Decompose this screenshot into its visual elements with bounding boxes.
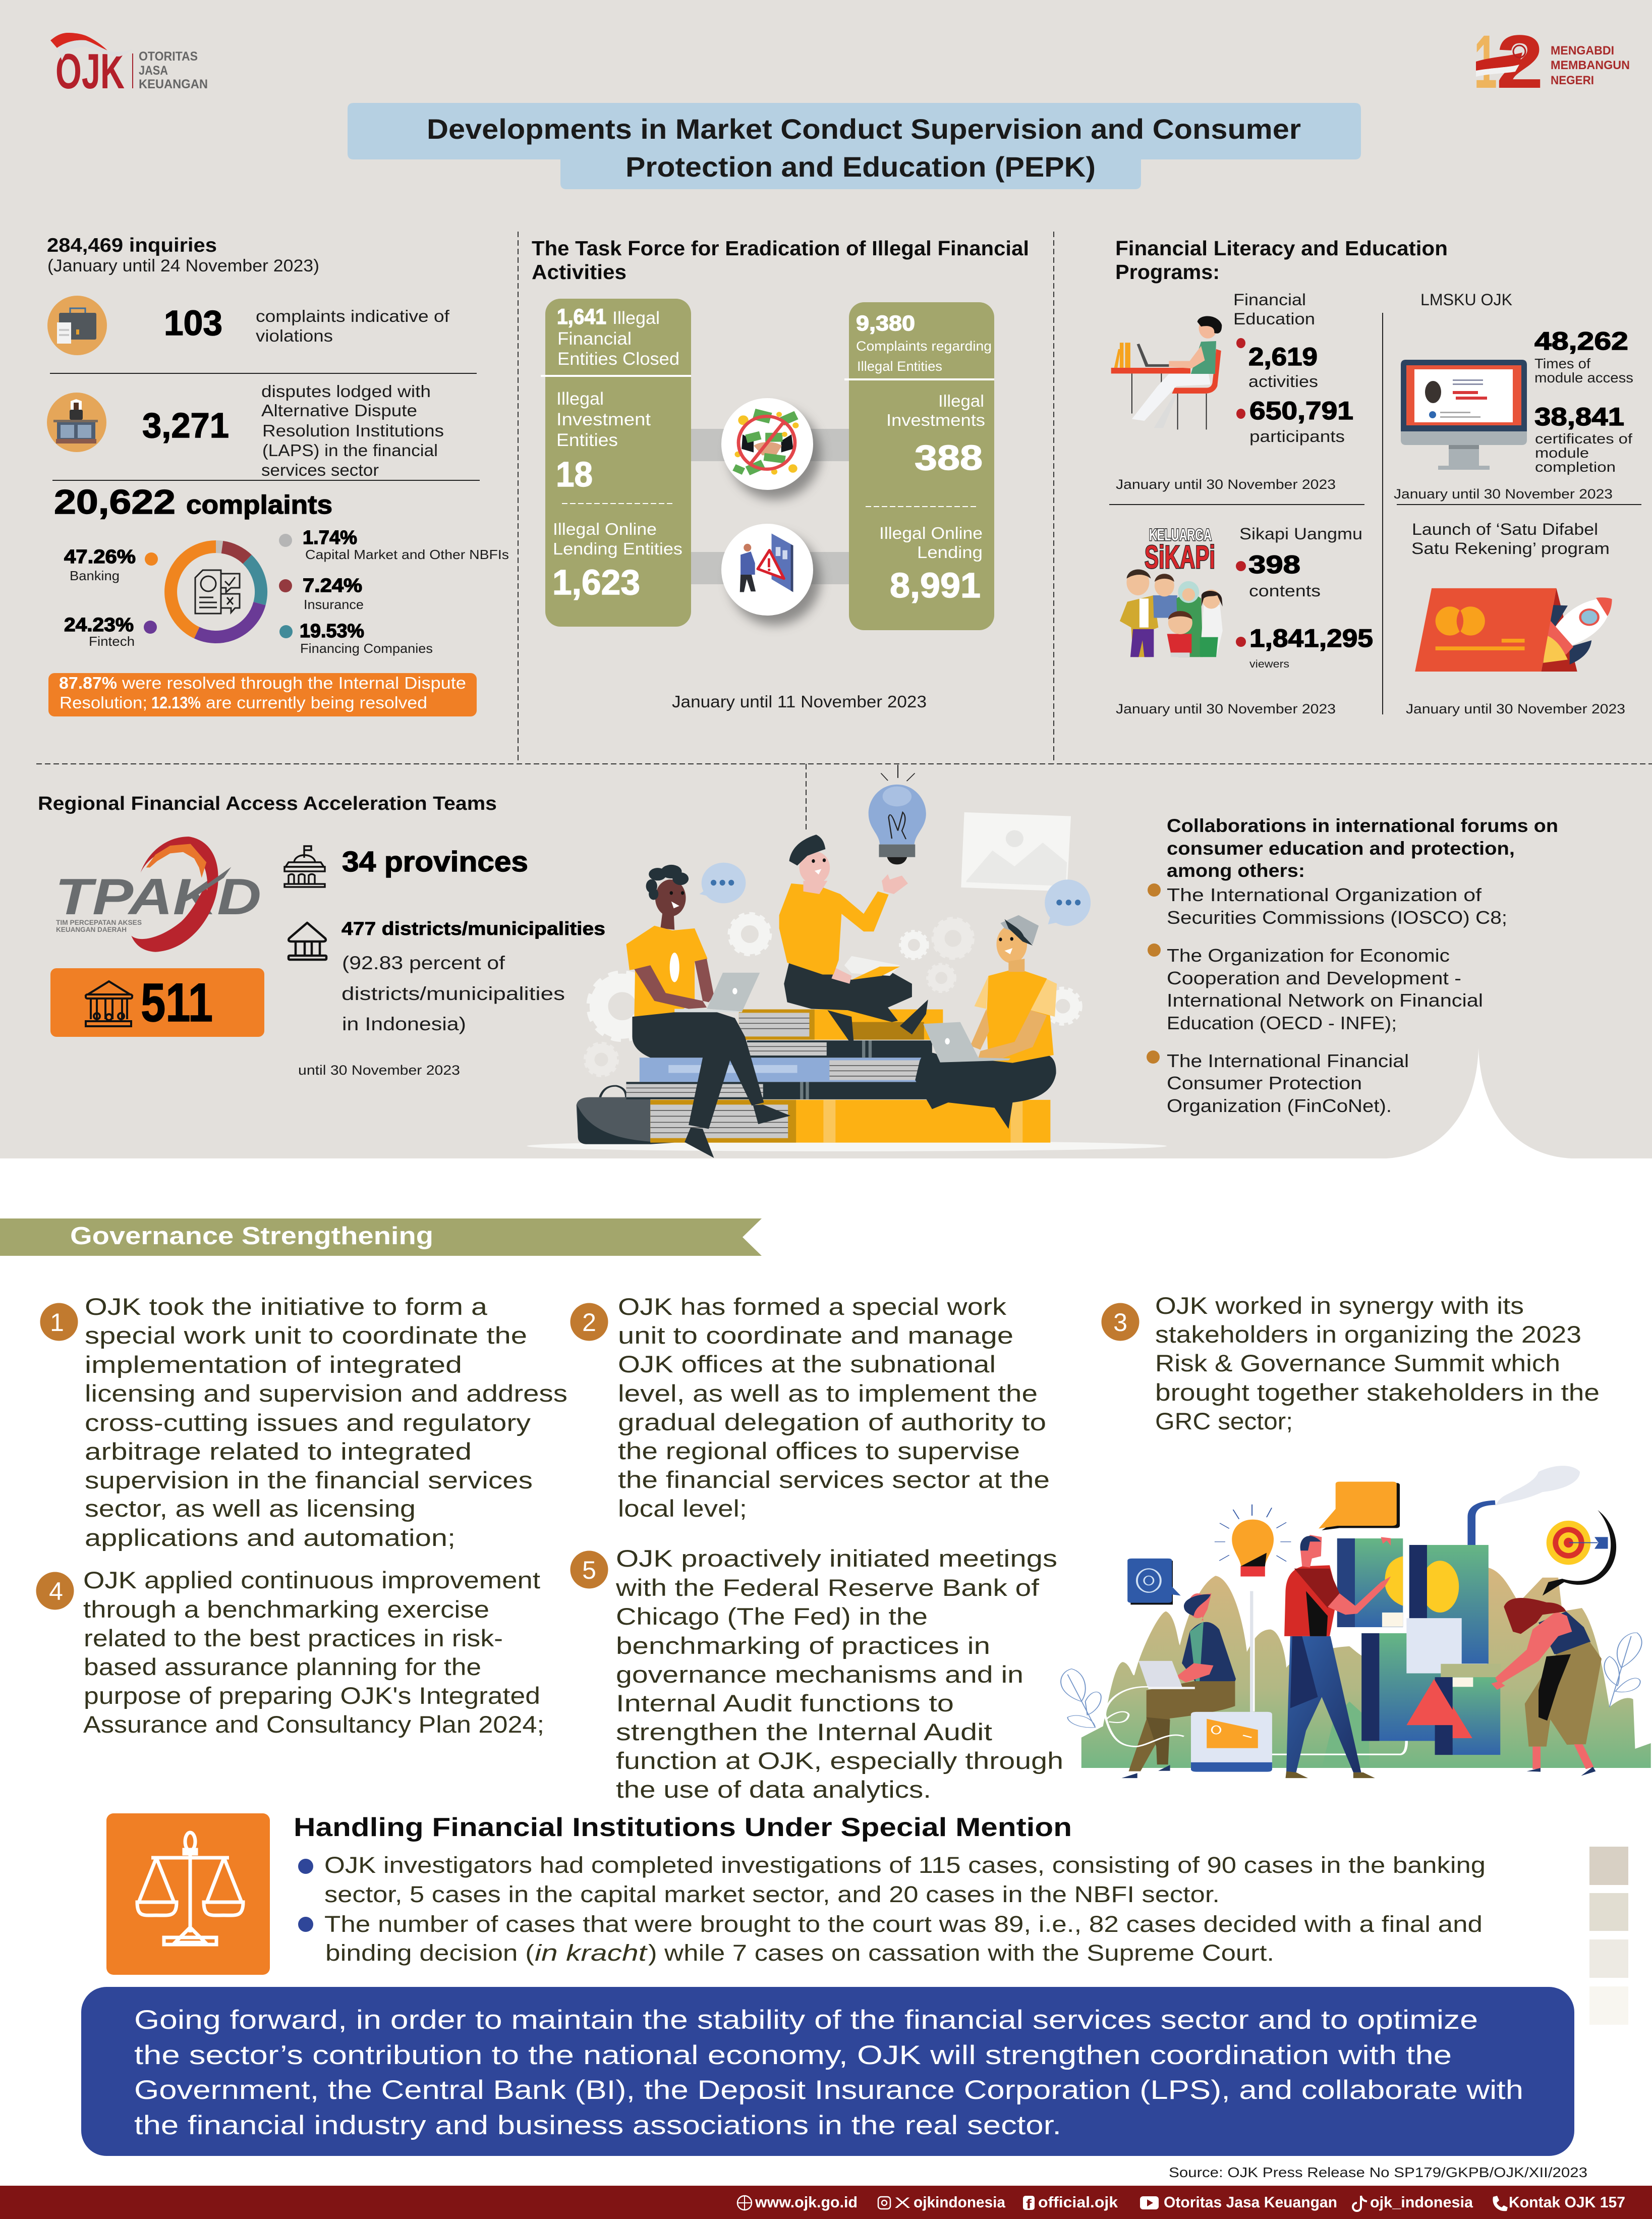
text block: item 5: governance mechanisms and in <box>616 1661 1023 1688</box>
footer: official.ojk <box>1038 2193 1118 2211</box>
card: entities closed: 18 <box>556 455 593 494</box>
title: Developments in Market Conduct Supervision and Consumer <box>427 113 1301 145</box>
text block: item 4: based assurance planning for the <box>84 1653 481 1680</box>
text block: item 2: gradual delegation of authority to <box>618 1409 1046 1435</box>
logo: 12 years: 2 <box>1496 19 1544 104</box>
block: LMSKU OJK: module access <box>1534 370 1633 385</box>
callout: going forward: Going forward, in order to maintain the stability of the financial services sector and to optimize <box>134 2005 1478 2035</box>
logo: OJK: OTORITAS <box>139 49 198 64</box>
callout: resolution rates: Resolution; <box>60 693 147 712</box>
block: international collaborations: International Network on Financial <box>1167 990 1483 1011</box>
text block: item 2: unit to coordinate and manage <box>618 1322 1013 1349</box>
donut chart <box>171 547 261 637</box>
stat: 477 districts: 477 districts/municipalities <box>341 918 605 939</box>
lightbulb <box>1215 1505 1291 1562</box>
bullet text: court cases <box>298 1911 1483 1966</box>
stat: 103 complaints: violations <box>256 326 333 345</box>
card: complaints regarding illegal entities: 8,991 <box>890 566 981 605</box>
footer: f <box>1026 2196 1032 2211</box>
bubbles <box>702 863 746 903</box>
block: Satu Difabel Satu Rekening <box>1406 520 1625 716</box>
stat: 3,271 disputes <box>142 382 444 479</box>
text block: item 1: licensing and supervision and address <box>85 1380 567 1407</box>
block: LMSKU OJK: Times of <box>1534 356 1590 371</box>
icon: complaint document <box>195 570 240 614</box>
heading: financial literacy: Financial Literacy and Education <box>1115 237 1448 260</box>
legend: financing companies <box>279 621 433 656</box>
text block: item 5: OJK proactively initiated meetings <box>616 1545 1057 1572</box>
stat: 477 districts: in Indonesia) <box>342 1014 466 1034</box>
block: Satu Difabel Satu Rekening: Satu Rekening’ program <box>1411 539 1610 558</box>
legend: capital market <box>279 527 509 562</box>
text block: item 4: OJK applied continuous improvement <box>83 1567 540 1593</box>
block: international collaborations: The International Financial <box>1167 1050 1409 1071</box>
decorative squares <box>1589 1847 1628 2025</box>
background panel <box>0 0 1652 1158</box>
text block: item 5: function at OJK, especially through <box>616 1747 1063 1774</box>
logo: 12 years <box>1474 19 1630 104</box>
bullet text: court cases: The number of cases that were brought to the court was 89, i.e., 82 cases decided with a final and <box>324 1911 1483 1937</box>
block: international collaborations: Organization (FinCoNet). <box>1167 1095 1392 1116</box>
banner: Governance Strengthening: Governance Strengthening <box>70 1223 433 1250</box>
title: Protection and Education (PEPK) <box>625 151 1096 183</box>
block: Satu Difabel Satu Rekening: January until 30 November 2023 <box>1406 701 1625 716</box>
bullet text: court cases: in kracht <box>535 1940 648 1966</box>
block: international collaborations: Securities Commissions (IOSCO) C8; <box>1167 907 1507 928</box>
panel: task force <box>532 237 1029 711</box>
panel: financial literacy <box>1109 237 1641 716</box>
block: Sikapi Uangmu <box>1116 525 1373 716</box>
footer: ojk_indonesia <box>1370 2193 1473 2211</box>
speech bubbles <box>1322 1483 1400 1530</box>
stat: 477 districts: (92.83 percent of <box>342 953 505 973</box>
bullet text: court cases: binding decision ( <box>325 1940 534 1966</box>
illustration: Sikapi family: SiKAPi <box>1145 539 1215 575</box>
legend: capital market: 1.74% <box>303 527 357 548</box>
logo: 12 years: MENGABDI <box>1551 44 1614 58</box>
stat: 3,271 disputes: Resolution Institutions <box>262 421 444 440</box>
block: international collaborations: Consumer Protection <box>1167 1073 1362 1093</box>
legend: insurance: Insurance <box>304 597 364 612</box>
icon: briefcase <box>47 296 107 355</box>
callout: going forward <box>81 1987 1574 2156</box>
logo: 12 years: MEMBANGUN <box>1551 59 1630 72</box>
text block: item 3: GRC sector; <box>1155 1408 1293 1434</box>
logo: OJK: KEUANGAN <box>139 77 208 91</box>
card: entities closed <box>541 299 691 627</box>
man in red <box>1284 1535 1391 1778</box>
illustration: card and rocket <box>1415 588 1612 672</box>
card: complaints regarding illegal entities: Lending <box>917 543 983 562</box>
block: Sikapi Uangmu: January until 30 November 2023 <box>1116 701 1336 716</box>
title <box>348 103 1361 189</box>
white spire cut-out <box>1386 1048 1571 1158</box>
man with laptop <box>1105 1593 1236 1778</box>
logo: TPAKD <box>55 837 261 952</box>
panel: handling financial institutions <box>106 1813 1486 1975</box>
bullet text: court cases: ) while 7 cases on cassation with the Supreme Court. <box>648 1940 1274 1966</box>
text block: item 4: through a benchmarking exercise <box>83 1596 489 1623</box>
legend: banking: 47.26% <box>64 546 136 568</box>
legend: insurance: 7.24% <box>303 575 362 596</box>
logo: OJK: JASA <box>139 64 168 78</box>
text block: item 2: the regional offices to supervise <box>618 1437 1020 1464</box>
card: complaints regarding illegal entities: 388 <box>915 438 983 477</box>
text block: item 1: cross-cutting issues and regulatory <box>85 1409 531 1436</box>
illustration: Sikapi family: KELUARGA <box>1149 526 1212 544</box>
text block: item 2: OJK offices at the subnational <box>618 1351 996 1377</box>
illustration: monitor <box>1401 360 1527 470</box>
logo: TPAKD: TPAKD <box>55 869 261 925</box>
plants <box>1061 1633 1642 1728</box>
block: Sikapi Uangmu: contents <box>1249 582 1321 600</box>
stat: 3,271 disputes: disputes lodged with <box>261 382 431 401</box>
block: LMSKU OJK: module <box>1535 445 1589 461</box>
text block: item 2: local level; <box>618 1495 747 1522</box>
footer: ojkindonesia <box>914 2193 1006 2211</box>
footer: Kontak OJK 157 <box>1509 2193 1625 2211</box>
block: financial education: participants <box>1249 427 1345 446</box>
legend: fintech: 24.23% <box>64 615 134 636</box>
legend: banking <box>64 546 158 583</box>
text block: item 1: implementation of integrated <box>85 1351 462 1378</box>
block: international collaborations: The Organization for Economic <box>1167 945 1450 966</box>
block: Satu Difabel Satu Rekening: Launch of ‘Satu Difabel <box>1412 520 1598 538</box>
text block: item 1: arbitrage related to integrated <box>85 1438 472 1465</box>
stat: 3,271 disputes: Alternative Dispute <box>261 401 417 420</box>
block: financial education: January until 30 November 2023 <box>1116 477 1336 492</box>
stat: 103 complaints: 103 <box>164 303 222 343</box>
block: LMSKU OJK: 48,262 <box>1534 327 1628 355</box>
text block: item 1: OJK took the initiative to form a <box>85 1293 488 1320</box>
card: complaints regarding illegal entities: Illegal Online <box>879 524 983 542</box>
text block: item 5: benchmarking of practices in <box>616 1632 990 1659</box>
logo: TPAKD: TIM PERCEPATAN AKSES <box>56 918 142 926</box>
stat: 3,271 disputes: (LAPS) in the financial <box>262 441 438 460</box>
text block: item 3: 3 <box>1113 1308 1127 1337</box>
block: financial education: 650,791 <box>1249 397 1353 425</box>
block: international collaborations: The International Organization of <box>1167 884 1482 905</box>
text block: item 3 <box>1102 1292 1600 1434</box>
card: entities closed: 1,623 <box>552 563 640 602</box>
text block: item 2: level, as well as to implement the <box>618 1380 1038 1407</box>
callout: going forward: the financial industry and business associations in the real sector. <box>134 2111 1061 2140</box>
block: LMSKU OJK: completion <box>1535 459 1616 475</box>
text block: item 4: related to the best practices in risk- <box>84 1625 503 1651</box>
block: international collaborations <box>1147 815 1558 1116</box>
stat: 34 provinces: 34 provinces <box>342 846 528 878</box>
card: complaints regarding illegal entities: Complaints regarding <box>856 339 992 354</box>
bullet text: investigations: OJK investigators had completed investigations of 115 cases, consisting of 90 cases in the banking <box>324 1852 1486 1878</box>
text block: item 5: Chicago (The Fed) in the <box>616 1603 928 1630</box>
callout: resolution rates: are currently being resolved <box>206 693 427 712</box>
callout: resolution rates <box>48 673 477 716</box>
stat: 103 complaints: complaints indicative of <box>256 307 450 325</box>
text block: item 1: supervision in the financial services <box>85 1467 533 1493</box>
text block: item 2: 2 <box>582 1308 596 1337</box>
heading: regional teams: Regional Financial Access Acceleration Teams <box>38 793 497 814</box>
heading: 20,622 complaints: complaints <box>186 490 332 520</box>
illustration: governance team <box>1061 1466 1651 1778</box>
text block: item 1: sector, as well as licensing <box>85 1495 416 1522</box>
block: Sikapi Uangmu: viewers <box>1249 658 1289 670</box>
bullet text: investigations: sector, 5 cases in the capital market sector, and 20 cases in the NBFI sector. <box>324 1881 1220 1907</box>
illustration: Sikapi family <box>1120 526 1223 657</box>
icon: provincial building <box>284 846 325 887</box>
logo: 12 years: 1 <box>1474 19 1497 104</box>
heading: handling institutions: Handling Financial Institutions Under Special Mention <box>294 1813 1072 1842</box>
heading: inquiries: 284,469 inquiries <box>47 235 217 256</box>
text block: item 3: OJK worked in synergy with its <box>1155 1292 1524 1319</box>
card: entities closed: 1,641 <box>557 305 606 329</box>
icon: scales of justice <box>106 1813 270 1975</box>
legend: financing companies: 19.53% <box>300 621 364 642</box>
block: financial education: Education <box>1233 310 1315 328</box>
logo: OJK: OJK <box>55 43 125 99</box>
card: entities closed: Illegal Online <box>553 520 657 538</box>
logo: TPAKD: KEUANGAN DAERAH <box>56 925 127 933</box>
card: complaints regarding illegal entities: Illegal Entities <box>857 359 942 374</box>
text block: item 2: the financial services sector at the <box>618 1466 1050 1493</box>
text block: item 4: Assurance and Consultancy Plan 2024; <box>83 1711 544 1738</box>
footer: X <box>894 2195 910 2211</box>
callout: going forward: the sector’s contribution to the national economy, OJK will strengthen coordination with the <box>134 2040 1452 2070</box>
text block: item 4: 4 <box>49 1577 63 1605</box>
block: financial education <box>1111 291 1353 492</box>
callout: resolution rates: were resolved through the Internal Dispute <box>122 674 466 692</box>
block: Sikapi Uangmu: 1,841,295 <box>1249 624 1373 652</box>
icon: prohibited money handshake <box>721 398 821 500</box>
card: entities closed: Financial <box>557 329 632 349</box>
woman <box>1491 1598 1602 1776</box>
icon: bank with people <box>86 981 132 1026</box>
block: financial education: 2,619 <box>1248 343 1318 371</box>
text block: item 1: 1 <box>50 1308 64 1337</box>
block: international collaborations: consumer education and protection, <box>1167 838 1515 859</box>
text block: item 3: stakeholders in organizing the 2023 <box>1155 1321 1581 1348</box>
block: international collaborations: Education (OECD - INFE); <box>1167 1013 1397 1033</box>
stat: 511 teams <box>50 968 264 1037</box>
heading: financial literacy <box>1115 237 1448 284</box>
text block: item 5: strengthen the Internal Audit <box>616 1718 992 1745</box>
source: Source: OJK Press Release No SP179/GKPB/OJK/XII/2023 <box>1169 2165 1587 2180</box>
block: LMSKU OJK: LMSKU OJK <box>1420 291 1512 309</box>
pipe and smoke <box>1471 1503 1495 1546</box>
card: complaints regarding illegal entities: Illegal <box>938 392 984 410</box>
card: entities closed: Lending Entities <box>553 539 682 558</box>
text block: item 1: special work unit to coordinate the <box>85 1322 527 1349</box>
icon: judge <box>47 393 106 452</box>
text block: item 3: brought together stakeholders in the <box>1155 1379 1600 1406</box>
legend: financing companies: Financing Companies <box>300 641 433 656</box>
block: international collaborations: Collaborations in international forums on <box>1167 815 1558 836</box>
bullet text: investigations <box>298 1852 1486 1907</box>
text block: item 2: OJK has formed a special work <box>618 1293 1007 1320</box>
gear bubble <box>1130 1561 1173 1604</box>
icon: online lending warning <box>721 524 821 625</box>
target <box>1547 1521 1590 1565</box>
person 2 <box>779 835 928 1042</box>
block: LMSKU OJK: January until 30 November 2023 <box>1394 486 1613 502</box>
heading: financial literacy: Programs: <box>1115 260 1220 284</box>
text block: item 4: purpose of preparing OJK's Integrated <box>84 1682 540 1709</box>
heading: 20,622 complaints <box>54 483 332 521</box>
card: entities closed: Entities <box>556 430 618 450</box>
stat: 477 districts: districts/municipalities <box>341 983 565 1004</box>
legend: fintech: Fintech <box>89 634 135 649</box>
date label: task force: January until 11 November 2023 <box>672 692 927 711</box>
callout: going forward: Government, the Central Bank (BI), the Deposit Insurance Corporation (LPS), and collaborate with <box>134 2075 1523 2105</box>
card: complaints regarding illegal entities: Investments <box>886 411 985 429</box>
card: entities closed: Illegal <box>556 389 604 409</box>
block: LMSKU OJK: 38,841 <box>1534 403 1624 431</box>
person 3 <box>915 915 1057 1129</box>
stat: 477 districts <box>289 918 605 1034</box>
book stack <box>577 1097 650 1144</box>
block: Sikapi Uangmu: Sikapi Uangmu <box>1239 525 1362 543</box>
heading: task force: Activities <box>532 260 626 284</box>
person 1 <box>626 865 790 1158</box>
date label: regional teams: until 30 November 2023 <box>298 1063 460 1078</box>
text block: item 5 <box>570 1545 1063 1803</box>
card: entities closed: Illegal <box>612 308 660 328</box>
stat: 3,271 disputes: services sector <box>261 461 379 479</box>
text block: item 5: Internal Audit functions to <box>616 1690 954 1716</box>
text block: item 1: applications and automation; <box>85 1524 455 1551</box>
heading: 20,622 complaints: 20,622 <box>54 483 176 521</box>
heading: task force <box>532 237 1029 284</box>
illustration: students on books <box>527 765 1167 1158</box>
panels <box>1361 1633 1441 1741</box>
legend: banking: Banking <box>70 568 120 583</box>
stat: 3,271 disputes: 3,271 <box>142 406 229 445</box>
gears <box>585 914 1080 1076</box>
callout: resolution rates: 12.13% <box>151 693 201 712</box>
heading: inquiries: (January until 24 November 2023) <box>47 256 319 275</box>
footer <box>0 2186 1652 2219</box>
card: entities closed: Entities Closed <box>557 349 679 369</box>
block: international collaborations: among others: <box>1167 860 1305 881</box>
text block: item 4 <box>36 1567 544 1738</box>
text block: item 3: Risk & Governance Summit which <box>1155 1350 1560 1376</box>
lightbulb <box>881 765 915 781</box>
footer: www.ojk.go.id <box>755 2193 858 2211</box>
heading: inquiries <box>47 235 319 275</box>
stat: 34 provinces <box>284 846 528 887</box>
heading: task force: The Task Force for Eradication of Illegal Financial <box>532 237 1029 260</box>
logo: 12 years: NEGERI <box>1551 74 1594 87</box>
block: financial education: Financial <box>1233 291 1306 309</box>
block: Sikapi Uangmu: 398 <box>1248 550 1300 579</box>
card: complaints regarding illegal entities <box>844 302 994 630</box>
panel: inquiries and complaints <box>47 235 509 716</box>
callout: resolution rates: 87.87% <box>59 674 117 692</box>
legend: fintech <box>64 615 157 649</box>
stat: 511 teams: 511 <box>141 972 213 1033</box>
footer: Otoritas Jasa Keuangan <box>1164 2193 1337 2211</box>
illustration: student at desk <box>1111 316 1222 429</box>
card box <box>1191 1712 1272 1772</box>
legend: capital market: Capital Market and Other NBFIs <box>305 547 509 562</box>
panel: regional financial access <box>38 765 1558 1158</box>
text block: item 5: the use of data analytics. <box>616 1776 931 1803</box>
card: complaints regarding illegal entities: 9,380 <box>856 311 915 336</box>
block: LMSKU OJK <box>1394 291 1633 502</box>
text block: item 2 <box>570 1293 1050 1522</box>
logo: OJK <box>50 33 208 99</box>
banner: Governance Strengthening <box>0 1218 762 1256</box>
text block: item 1 <box>40 1293 567 1551</box>
text block: item 5: with the Federal Reserve Bank of <box>615 1574 1040 1601</box>
picture frame <box>961 812 1071 892</box>
stat: 103 complaints <box>164 303 450 345</box>
text block: item 5: 5 <box>582 1556 596 1584</box>
block: LMSKU OJK: certificates of <box>1535 431 1632 447</box>
legend: insurance <box>279 575 364 612</box>
card: entities closed: Investment <box>556 410 651 429</box>
block: financial education: activities <box>1248 372 1318 391</box>
icon: bank <box>289 923 326 960</box>
block: international collaborations: Cooperation and Development - <box>1167 968 1461 988</box>
